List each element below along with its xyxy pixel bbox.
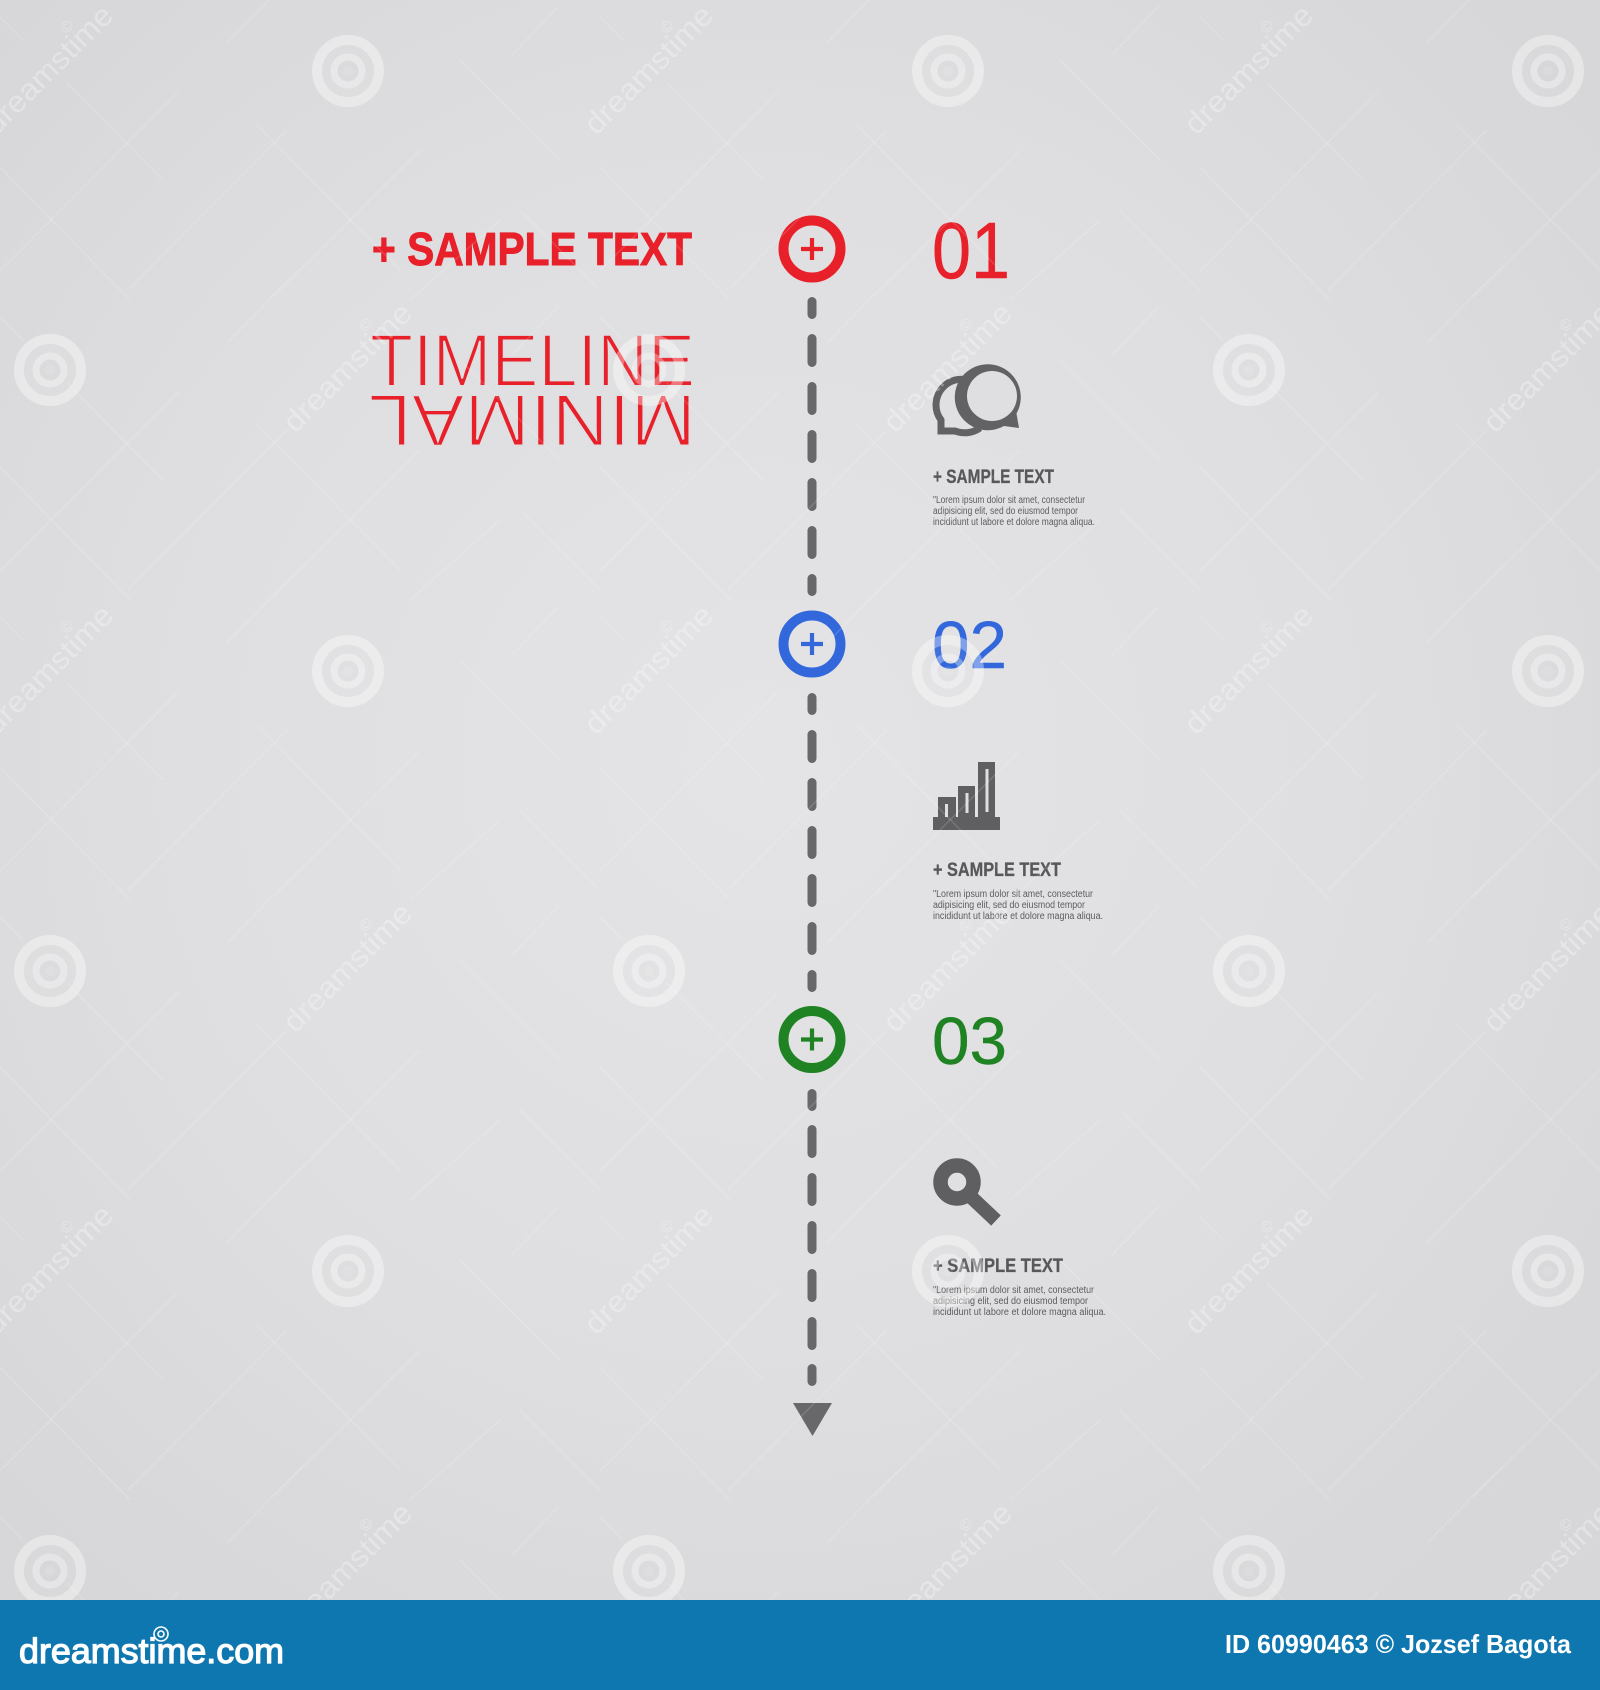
label 1: + SAMPLE TEXT (933, 466, 1054, 488)
label 2: + SAMPLE TEXT (933, 859, 1061, 881)
watermark overlay: © (1556, 1515, 1577, 1536)
title: timeline minimal (368, 319, 696, 460)
watermark overlay: © (956, 1515, 977, 1536)
watermark overlay: © (1257, 1217, 1278, 1238)
watermark overlay: dreamstime (578, 1199, 720, 1341)
watermark overlay: © (1556, 315, 1577, 336)
watermark overlay: © (356, 315, 377, 336)
footer banner (0, 1600, 1600, 1690)
watermark overlay: dreamstime (1178, 0, 1320, 141)
body text 2: "Lorem ipsum dolor sit amet, consectetur (933, 889, 1094, 900)
watermark overlay: © (1257, 17, 1278, 38)
body text 1: incididunt ut labore et dolore magna aliqua. (933, 517, 1095, 528)
icon: bar chart (933, 762, 1000, 830)
body text 3: adipisicing elit, sed do eiusmod tempor (933, 1296, 1089, 1307)
title word: timeline: TIMELINE (370, 319, 695, 402)
watermark overlay: dreamstime (1178, 1199, 1320, 1341)
timeline dashed line with arrow (793, 297, 832, 1436)
footer logo text: dreamstime.com (19, 1632, 284, 1671)
watermark overlay: © (657, 617, 678, 638)
number 03: 03 (932, 1004, 1007, 1079)
heading: sample text: + SAMPLE TEXT (372, 223, 692, 275)
watermark overlay: dreamstime (1178, 599, 1320, 741)
watermark overlay: dreamstime (578, 599, 720, 741)
watermark overlay: © (57, 1217, 78, 1238)
watermark overlay: dreamstime (277, 297, 419, 439)
body text 2: adipisicing elit, sed do eiusmod tempor (933, 900, 1086, 911)
body text 2 (933, 889, 1103, 922)
number 02: 02 (932, 608, 1007, 683)
watermark overlay: dreamstime (877, 297, 1019, 439)
watermark overlay: © (657, 17, 678, 38)
watermark overlay: © (57, 17, 78, 38)
watermark overlay: dreamstime (877, 897, 1019, 1039)
watermark overlay: dreamstime (578, 0, 720, 141)
watermark overlay: © (1556, 915, 1577, 936)
footer credit: ID 60990463 © Jozsef Bagota (1225, 1629, 1572, 1659)
icon: magnifier (940, 1166, 996, 1220)
body text 1: "Lorem ipsum dolor sit amet, consectetur (933, 495, 1086, 506)
body text 1: adipisicing elit, sed do eiusmod tempor (933, 506, 1079, 517)
watermark overlay: dreamstime (877, 1497, 1019, 1639)
body text 3: incididunt ut labore et dolore magna aliqua. (933, 1307, 1106, 1318)
body text 1 (933, 495, 1095, 528)
body text 3 (933, 1285, 1106, 1318)
title word: minimal rotated: MINIMAL (368, 379, 696, 460)
number 01: 01 (932, 206, 1010, 295)
watermark overlay: © (356, 915, 377, 936)
watermark overlay: dreamstime (277, 1497, 419, 1639)
footer logo spiral (154, 1627, 168, 1641)
watermark overlay: © (57, 617, 78, 638)
step 1 marker (784, 220, 840, 278)
arrow head (793, 1403, 832, 1436)
watermark overlay: dreamstime (277, 897, 419, 1039)
step 2 marker (784, 616, 840, 672)
body text 2: incididunt ut labore et dolore magna aliqua. (933, 911, 1103, 922)
watermark overlay: © (956, 315, 977, 336)
label 3: + SAMPLE TEXT (933, 1255, 1063, 1277)
body text 3: "Lorem ipsum dolor sit amet, consectetur (933, 1285, 1095, 1296)
watermark overlay: © (356, 1515, 377, 1536)
watermark overlay: © (1257, 617, 1278, 638)
watermark overlay: © (956, 915, 977, 936)
watermark overlay: © (657, 1217, 678, 1238)
step 3 marker (784, 1011, 840, 1068)
icon: chat bubbles (936, 364, 1021, 433)
